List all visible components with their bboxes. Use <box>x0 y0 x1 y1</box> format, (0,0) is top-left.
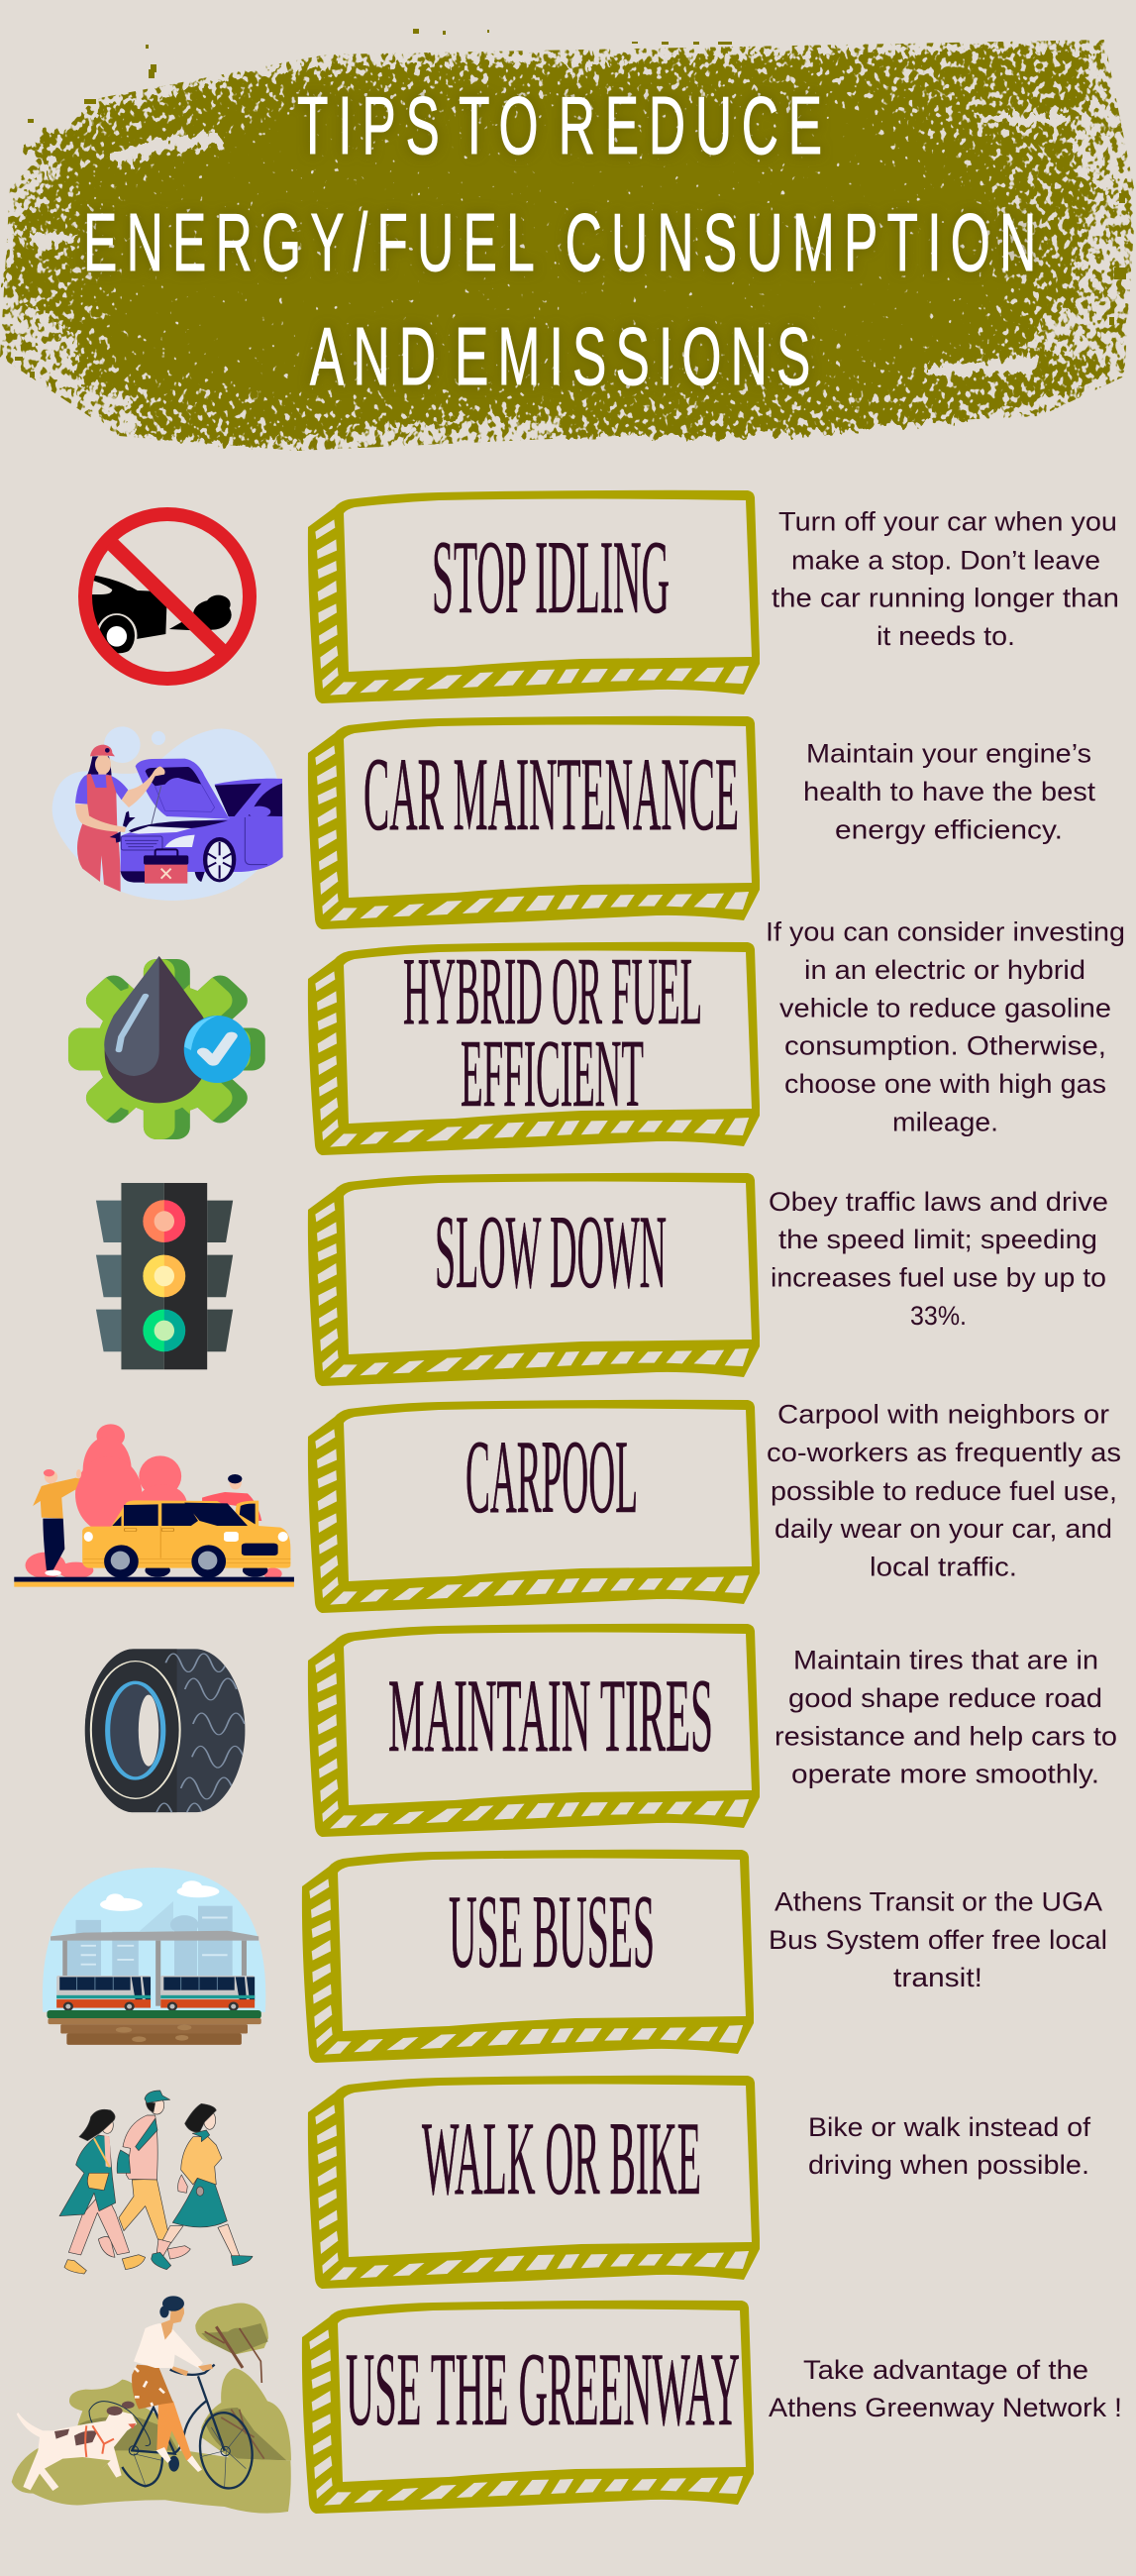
panel: stop idling: STOP IDLING <box>432 519 670 635</box>
tip text: driving when possible. <box>808 2150 1089 2180</box>
tip text: energy efficiency. <box>835 814 1063 844</box>
tip text <box>772 507 1119 651</box>
icon: oil drop on gear with check <box>67 956 265 1139</box>
panel: carpool: CARPOOL <box>465 1419 638 1535</box>
label frame <box>308 1173 760 1386</box>
tip text: increases fuel use by up to <box>771 1262 1106 1292</box>
tip text <box>769 1187 1108 1331</box>
panel: slow down <box>96 1173 1108 1386</box>
title: ENERGY/FUEL CUNSUMPTION <box>83 195 1036 288</box>
icon: no idling sign <box>85 514 250 679</box>
panel: hybrid or fuel efficient: EFFICIENT <box>461 1020 644 1127</box>
tip text: Athens Greenway Network ! <box>769 2393 1122 2422</box>
tip text: possible to reduce fuel use, <box>771 1476 1117 1506</box>
icon: three walking people <box>59 2091 253 2274</box>
tip text <box>775 1645 1117 1789</box>
panel: car maintenance <box>52 716 1096 929</box>
title <box>83 78 1036 402</box>
tip text: health to have the best <box>803 777 1096 806</box>
icon: buses at station <box>43 1868 265 2045</box>
tip text: If you can consider investing <box>766 917 1125 947</box>
tip text: transit! <box>893 1963 982 1992</box>
tip text: vehicle to reduce gasoline <box>779 993 1111 1022</box>
panel: maintain tires <box>81 1624 1117 1837</box>
tip text <box>767 1399 1121 1581</box>
title: TIPS TO REDUCE <box>297 78 822 171</box>
tip text: operate more smoothly. <box>791 1760 1099 1789</box>
stray paint flecks <box>15 29 1126 377</box>
tip text: consumption. Otherwise, <box>784 1030 1106 1060</box>
label frame <box>308 1624 760 1837</box>
icon: traffic light <box>96 1183 233 1369</box>
tip text <box>769 1886 1107 1992</box>
tip text: resistance and help cars to <box>775 1722 1117 1752</box>
panel: stop idling <box>85 490 1119 703</box>
tip text: Athens Transit or the UGA <box>775 1886 1102 1916</box>
tip text: make a stop. Don’t leave <box>791 545 1100 575</box>
tip text: Carpool with neighbors or <box>777 1399 1109 1429</box>
tip text: Obey traffic laws and drive <box>769 1187 1108 1217</box>
icon: mechanic and car <box>52 726 283 901</box>
tip text: the car running longer than <box>772 583 1119 612</box>
tip text: choose one with high gas <box>784 1069 1106 1099</box>
tip text: Turn off your car when you <box>778 507 1117 537</box>
label frame <box>308 716 760 929</box>
panel: use the greenway <box>12 2296 1122 2514</box>
tip text: daily wear on your car, and <box>775 1514 1112 1544</box>
panel: carpool <box>14 1399 1121 1613</box>
tip text: Maintain your engine’s <box>806 739 1091 769</box>
panel: walk or bike <box>59 2076 1091 2289</box>
tip text <box>808 2112 1091 2180</box>
label frame <box>308 942 760 1155</box>
tip text: good shape reduce road <box>788 1683 1102 1713</box>
tip text: Bus System offer free local <box>769 1925 1107 1955</box>
icon: tire <box>85 1649 246 1813</box>
label frame <box>308 1400 760 1613</box>
tip text: the speed limit; speeding <box>778 1225 1097 1254</box>
tip text: Maintain tires that are in <box>793 1645 1098 1674</box>
tip text: Bike or walk instead of <box>808 2112 1091 2142</box>
tip text: in an electric or hybrid <box>804 955 1085 985</box>
label frame <box>308 2076 760 2289</box>
panel: use buses: USE BUSES <box>449 1874 655 1989</box>
panel: use buses <box>43 1850 1107 2063</box>
tip text: Take advantage of the <box>803 2355 1088 2385</box>
title banner: olive brush stroke <box>0 0 1136 466</box>
icon: cyclist with dog in park <box>12 2296 291 2514</box>
tip text <box>803 739 1096 844</box>
title: AND EMISSIONS <box>310 309 810 402</box>
icon: yellow car with two people <box>14 1424 294 1587</box>
tip text: local traffic. <box>870 1552 1017 1581</box>
label: hybrid or fuel efficient <box>403 938 702 1127</box>
tip text: mileage. <box>892 1108 998 1137</box>
label frame <box>302 2301 754 2514</box>
tip text <box>766 917 1125 1137</box>
tip text: 33%. <box>910 1301 967 1331</box>
label frame <box>302 1850 754 2063</box>
label frame <box>308 490 760 703</box>
panel: hybrid or fuel efficient <box>53 917 1125 1155</box>
tip text <box>769 2355 1122 2422</box>
tip text: co-workers as frequently as <box>767 1438 1121 1467</box>
tip text: it needs to. <box>877 621 1015 651</box>
panel: slow down: SLOW DOWN <box>435 1194 667 1310</box>
